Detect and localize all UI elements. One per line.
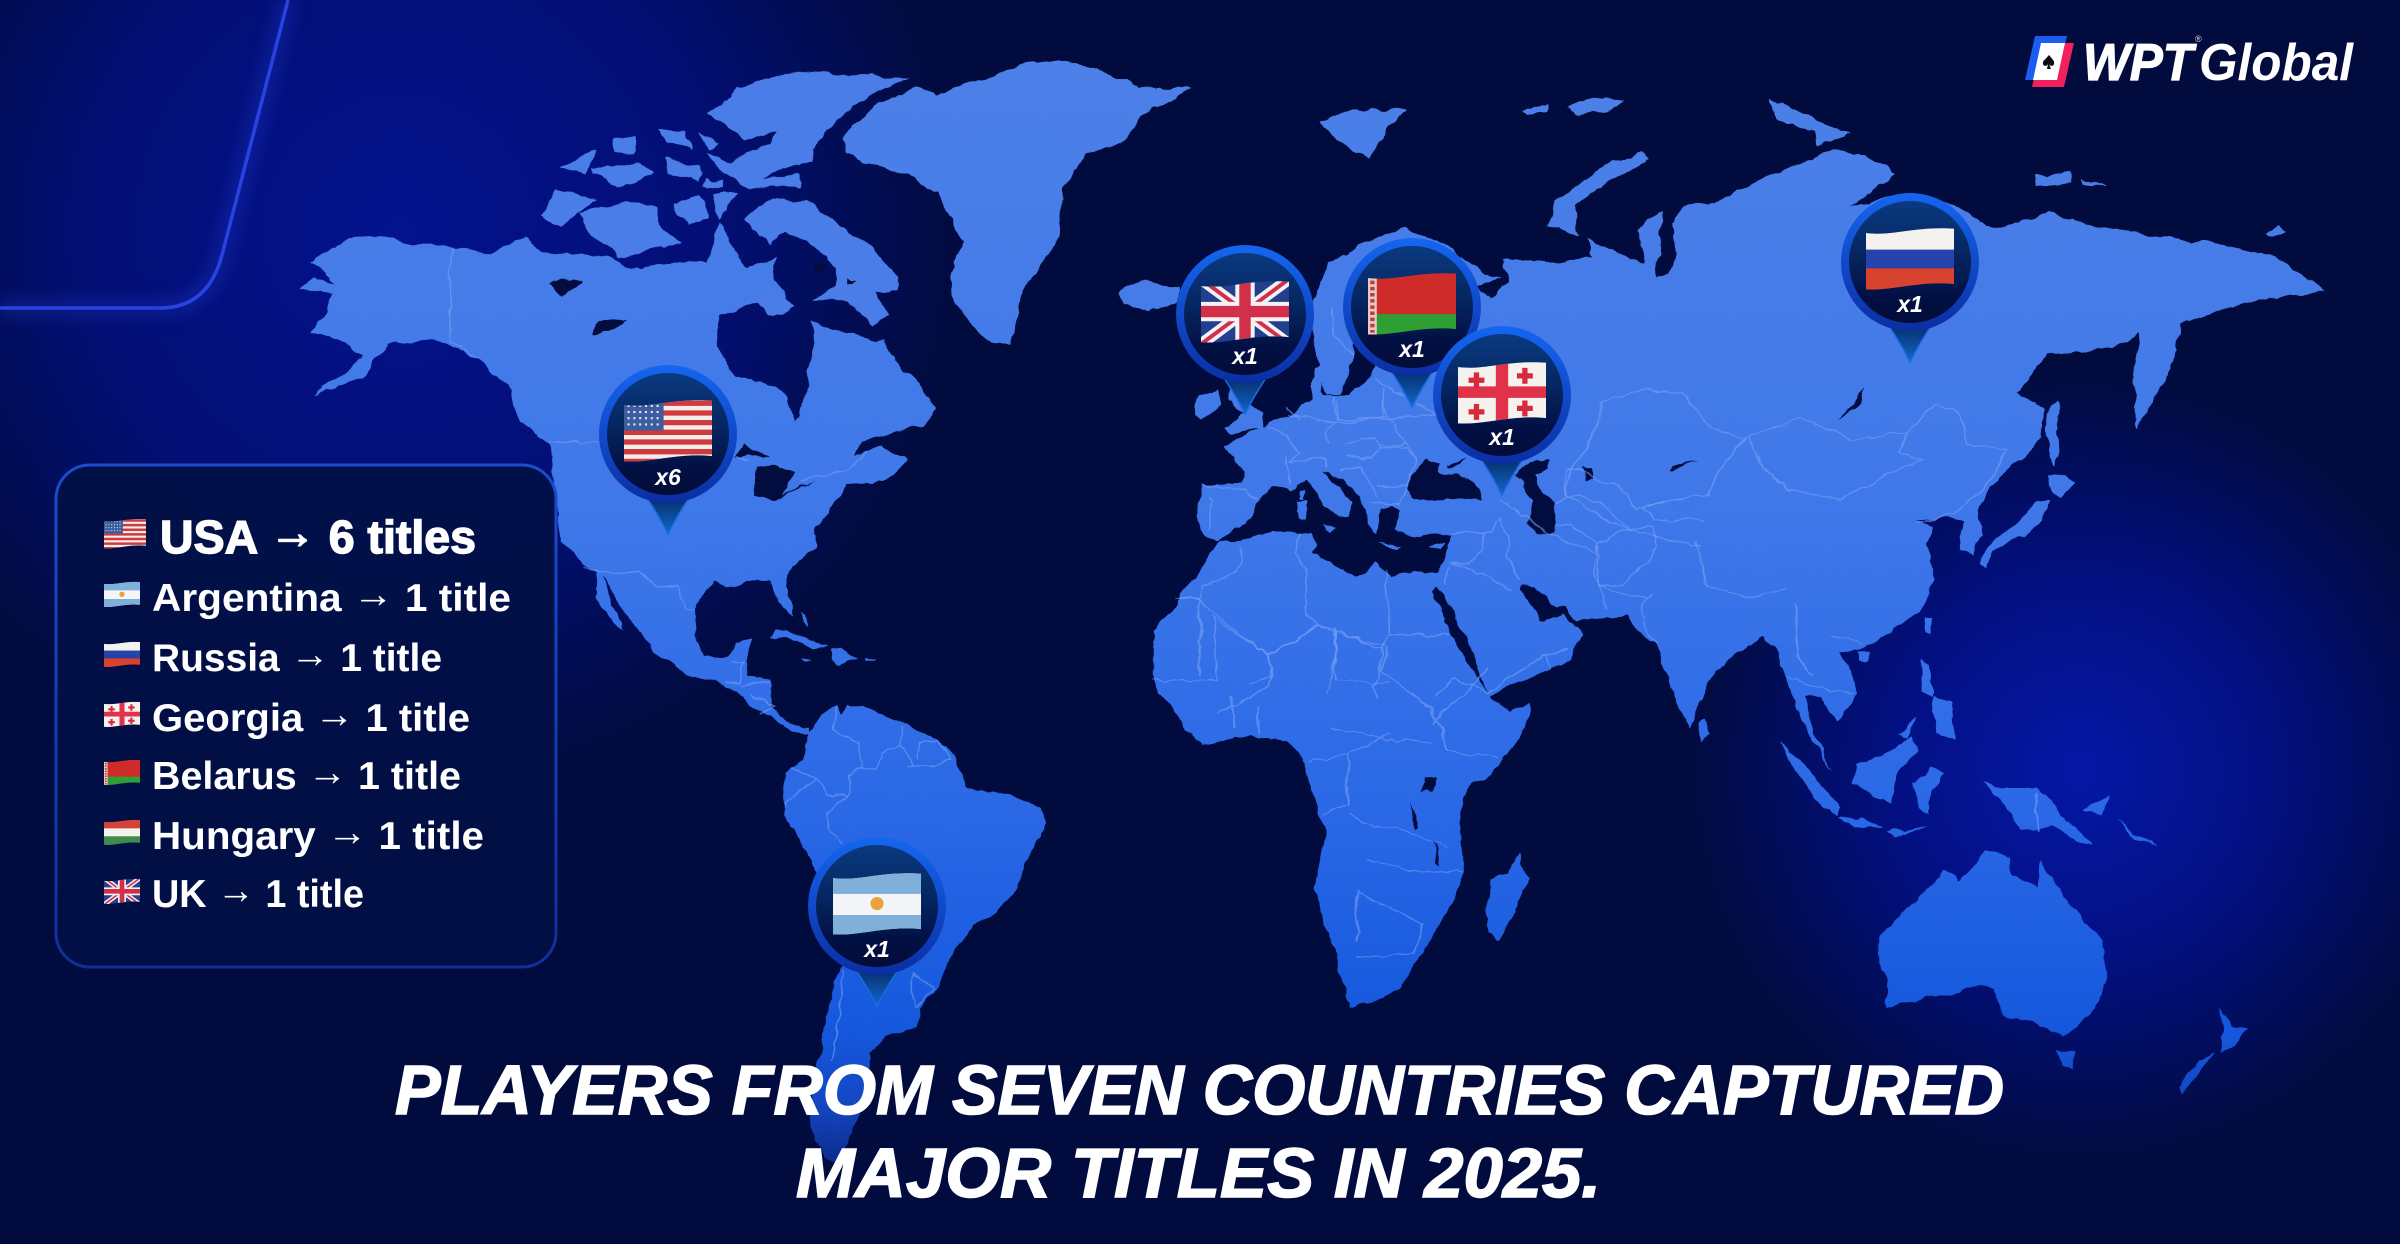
legend row: USA: 6 titles — [316, 511, 476, 563]
land: Arctic and Russian islands — [1319, 98, 2287, 467]
land: Japan, Taiwan, Hainan, Sri Lanka — [1697, 474, 2075, 742]
legend row: Argentina: 1 title — [394, 577, 511, 620]
legend row: Hungary: Hungary — [152, 815, 310, 858]
legend row: Russia: 1 title — [329, 637, 442, 680]
logo wordmark: Global — [2199, 34, 2354, 92]
title: MAJOR TITLES IN 2025. — [796, 1134, 1601, 1212]
land: Iceland, Britain, Ireland and northern European islands — [1117, 282, 1264, 433]
land: Australia, New Zealand, Madagascar — [1486, 851, 2248, 1094]
legend row: Argentina: Argentina — [152, 577, 334, 620]
legend row: UK: UK — [152, 873, 208, 916]
land: Eurasia — [1197, 150, 2323, 770]
legend row: Argentina — [104, 573, 511, 620]
map pin: Belarus: x1 — [1397, 336, 1425, 362]
title — [395, 1051, 2004, 1212]
legend row: Belarus: 1 title — [347, 755, 461, 798]
legend row: Hungary — [104, 811, 484, 858]
legend row: UK — [104, 869, 364, 916]
land: Southeast Asia and Oceania islands — [1780, 660, 2157, 846]
legend row: Russia: → — [291, 633, 329, 676]
map pin: USA: x6 — [653, 464, 681, 490]
legend row: USA — [104, 506, 476, 563]
legend row: UK: → — [217, 869, 255, 912]
map pin: Georgia — [1433, 326, 1571, 495]
legend row: Belarus: Belarus — [152, 755, 295, 798]
map pin: USA — [599, 365, 737, 534]
logo: WPT Global — [2025, 34, 2354, 92]
map pin: Georgia: x1 — [1487, 424, 1515, 450]
legend row: USA: USA — [160, 511, 255, 563]
icon: playing cards — [2025, 36, 2074, 87]
legend row: Belarus: → — [308, 751, 347, 794]
map pin: Argentina — [808, 837, 946, 1006]
land: Africa — [1154, 533, 1531, 1007]
continents — [302, 61, 2323, 1163]
land: Mediterranean islands — [1298, 490, 1445, 549]
legend row: Russia — [104, 633, 442, 680]
map pin: Russia — [1841, 193, 1979, 362]
legend row: Argentina: → — [353, 573, 394, 616]
world map — [302, 61, 2323, 1163]
title: PLAYERS FROM SEVEN COUNTRIES CAPTURED — [395, 1051, 2004, 1129]
legend row: Georgia: Georgia — [152, 697, 299, 740]
land: Canadian Arctic islands — [541, 72, 908, 325]
land: North and Central America — [302, 223, 934, 735]
map pin: Argentina: x1 — [862, 936, 890, 962]
logo wordmark — [2083, 34, 2354, 92]
map pin: UK: x1 — [1230, 343, 1258, 369]
neon corner line — [0, 0, 288, 308]
legend row: Georgia — [104, 693, 470, 740]
legend row: Hungary: → — [327, 811, 367, 854]
inland seas and lakes — [548, 262, 1865, 866]
legend row: Russia: Russia — [152, 637, 280, 680]
legend row: Georgia: 1 title — [354, 697, 470, 740]
panel: title counts legend — [56, 465, 556, 967]
legend row: USA: → — [269, 506, 316, 558]
land: Greenland — [842, 61, 1189, 346]
land: South America — [784, 704, 1047, 1163]
legend row: UK: 1 title — [255, 873, 364, 916]
country borders — [451, 247, 2037, 1060]
legend row: Belarus — [104, 751, 461, 798]
map pin: Russia: x1 — [1895, 291, 1923, 317]
map pin: UK — [1176, 245, 1314, 414]
land: Caribbean islands — [768, 612, 876, 664]
legend row: Hungary: 1 title — [367, 815, 484, 858]
map pin: Belarus — [1343, 238, 1481, 407]
legend row: Georgia: → — [314, 693, 354, 736]
logo wordmark: WPT — [2083, 34, 2197, 92]
logo wordmark: ® — [2195, 34, 2202, 44]
